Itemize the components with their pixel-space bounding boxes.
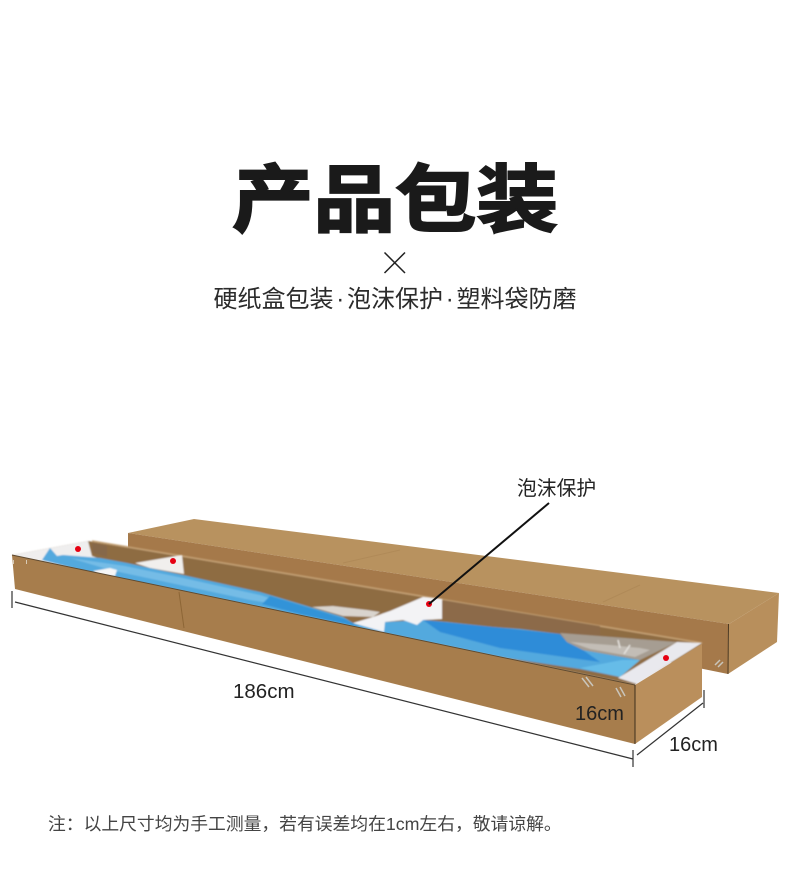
foam block 2 [135, 555, 184, 574]
icon: cross divider [384, 252, 406, 274]
dimension: length 186cm [12, 591, 633, 767]
small foam block [93, 568, 117, 576]
staples [582, 660, 723, 697]
box end face [635, 644, 702, 744]
dimension: length 186cm: 186cm [233, 680, 295, 703]
subtitle: 硬纸盒包装·泡沫保护·塑料袋防磨 [214, 286, 576, 313]
box front face [12, 555, 635, 744]
dimension: width 16cm: 16cm [669, 734, 718, 756]
cardboard lid [128, 519, 779, 674]
end foam [618, 642, 702, 684]
left foam [12, 541, 183, 576]
title: 产品包装 [232, 160, 558, 242]
dimension: height 16cm: 16cm [575, 703, 624, 725]
grey sliver of foam [312, 606, 380, 617]
foam block 3 [353, 597, 442, 632]
open box interior [12, 541, 702, 685]
callout: foam protection: 泡沫保护 [517, 478, 596, 500]
red marker dots [75, 546, 669, 661]
footnote: 注：以上尺寸均为手工测量，若有误差均在1cm左右，敬请谅解。 [48, 814, 562, 834]
blue plastic bag [42, 548, 640, 677]
callout: foam protection [429, 478, 596, 604]
back wall [12, 541, 702, 685]
dimension: width 16cm [637, 690, 718, 756]
clear plastic wrap [560, 633, 677, 660]
